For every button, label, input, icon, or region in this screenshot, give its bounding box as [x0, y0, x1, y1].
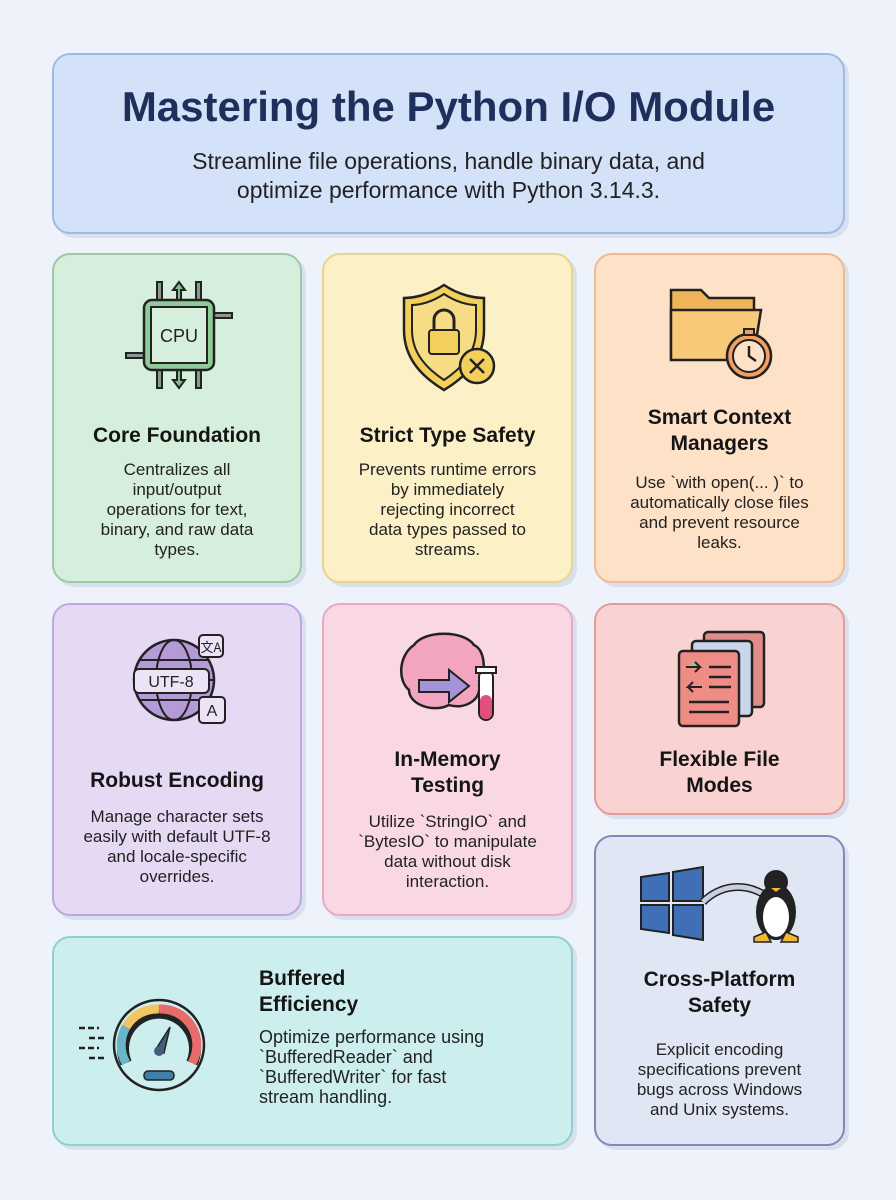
heading: Safety [688, 994, 751, 1017]
body: input/output [133, 480, 221, 499]
subtitle [192, 148, 705, 203]
body: types. [154, 540, 200, 559]
panel: robust encoding [52, 603, 302, 916]
body: operations for text, [107, 500, 247, 519]
heading [259, 967, 358, 1016]
body: specifications prevent [638, 1060, 801, 1079]
body: easily with default UTF-8 [83, 827, 271, 846]
heading: Strict Type Safety [360, 424, 535, 447]
heading: Buffered [259, 967, 345, 990]
panel: buffered efficiency [52, 936, 573, 1146]
body [83, 807, 271, 886]
body: streams. [415, 540, 480, 559]
heading: Efficiency [259, 993, 358, 1016]
title panel [52, 53, 845, 234]
body [630, 473, 809, 552]
heading [644, 968, 795, 1017]
heading: Smart Context [648, 406, 791, 429]
panel: cross-platform safety [594, 835, 845, 1146]
body: binary, and raw data [101, 520, 253, 539]
panel: strict type safety [322, 253, 573, 583]
icon: globe utf-8 [132, 634, 226, 724]
icon: windows and penguin [640, 866, 799, 943]
body: Optimize performance using [259, 1027, 484, 1047]
heading: Robust Encoding [90, 769, 264, 792]
body: Utilize `StringIO` and [369, 812, 526, 831]
body: stream handling. [259, 1087, 392, 1107]
body: rejecting incorrect [380, 500, 515, 519]
body: and prevent resource [639, 513, 800, 532]
body [637, 1040, 802, 1119]
heading [659, 748, 780, 797]
heading: Core Foundation [93, 424, 261, 447]
body: Use `with open(... )` to [635, 473, 804, 492]
body: Explicit encoding [656, 1040, 783, 1059]
body: and Unix systems. [650, 1100, 789, 1119]
body: automatically close files [630, 493, 809, 512]
body: data types passed to [369, 520, 526, 539]
body: overrides. [140, 867, 214, 886]
icon: cpu: CPU [160, 326, 198, 346]
body: bugs across Windows [637, 1080, 802, 1099]
body: Manage character sets [91, 807, 263, 826]
heading: Flexible File [659, 748, 780, 771]
panel: in-memory testing [322, 603, 573, 916]
subtitle: Streamline file operations, handle binary data, and [192, 148, 705, 174]
icon: speedometer [79, 998, 206, 1092]
body: `BufferedWriter` for fast [259, 1067, 446, 1087]
icon: globe utf-8: A [207, 703, 218, 720]
icon: globe utf-8: UTF-8 [148, 674, 194, 691]
heading [648, 406, 791, 455]
body [359, 460, 536, 559]
heading: Testing [411, 774, 484, 797]
icon: documents [678, 630, 766, 728]
body: data without disk [384, 852, 511, 871]
body: Prevents runtime errors [359, 460, 536, 479]
body: Centralizes all [124, 460, 230, 479]
body: `BytesIO` to manipulate [358, 832, 537, 851]
heading: Managers [670, 432, 769, 455]
body [259, 1027, 484, 1107]
panel: smart context managers [594, 253, 845, 583]
heading: Cross-Platform [644, 968, 795, 991]
panel: flexible file modes [594, 603, 845, 815]
body: by immediately [391, 480, 504, 499]
heading: Modes [686, 774, 753, 797]
body: interaction. [406, 872, 489, 891]
icon: cpu [125, 280, 233, 390]
icon: brain [400, 632, 497, 721]
title: Mastering the Python I/O Module [122, 83, 775, 130]
body [358, 812, 537, 891]
icon: folder with timer [670, 288, 772, 380]
subtitle: optimize performance with Python 3.14.3. [237, 177, 660, 203]
icon: shield [402, 284, 496, 392]
icon: globe utf-8: 文A [201, 637, 222, 656]
panel: core foundation [52, 253, 302, 583]
heading: In-Memory [394, 748, 501, 771]
heading [394, 748, 501, 797]
body: and locale-specific [107, 847, 247, 866]
body: leaks. [697, 533, 742, 552]
body: `BufferedReader` and [259, 1047, 433, 1067]
body [101, 460, 254, 559]
